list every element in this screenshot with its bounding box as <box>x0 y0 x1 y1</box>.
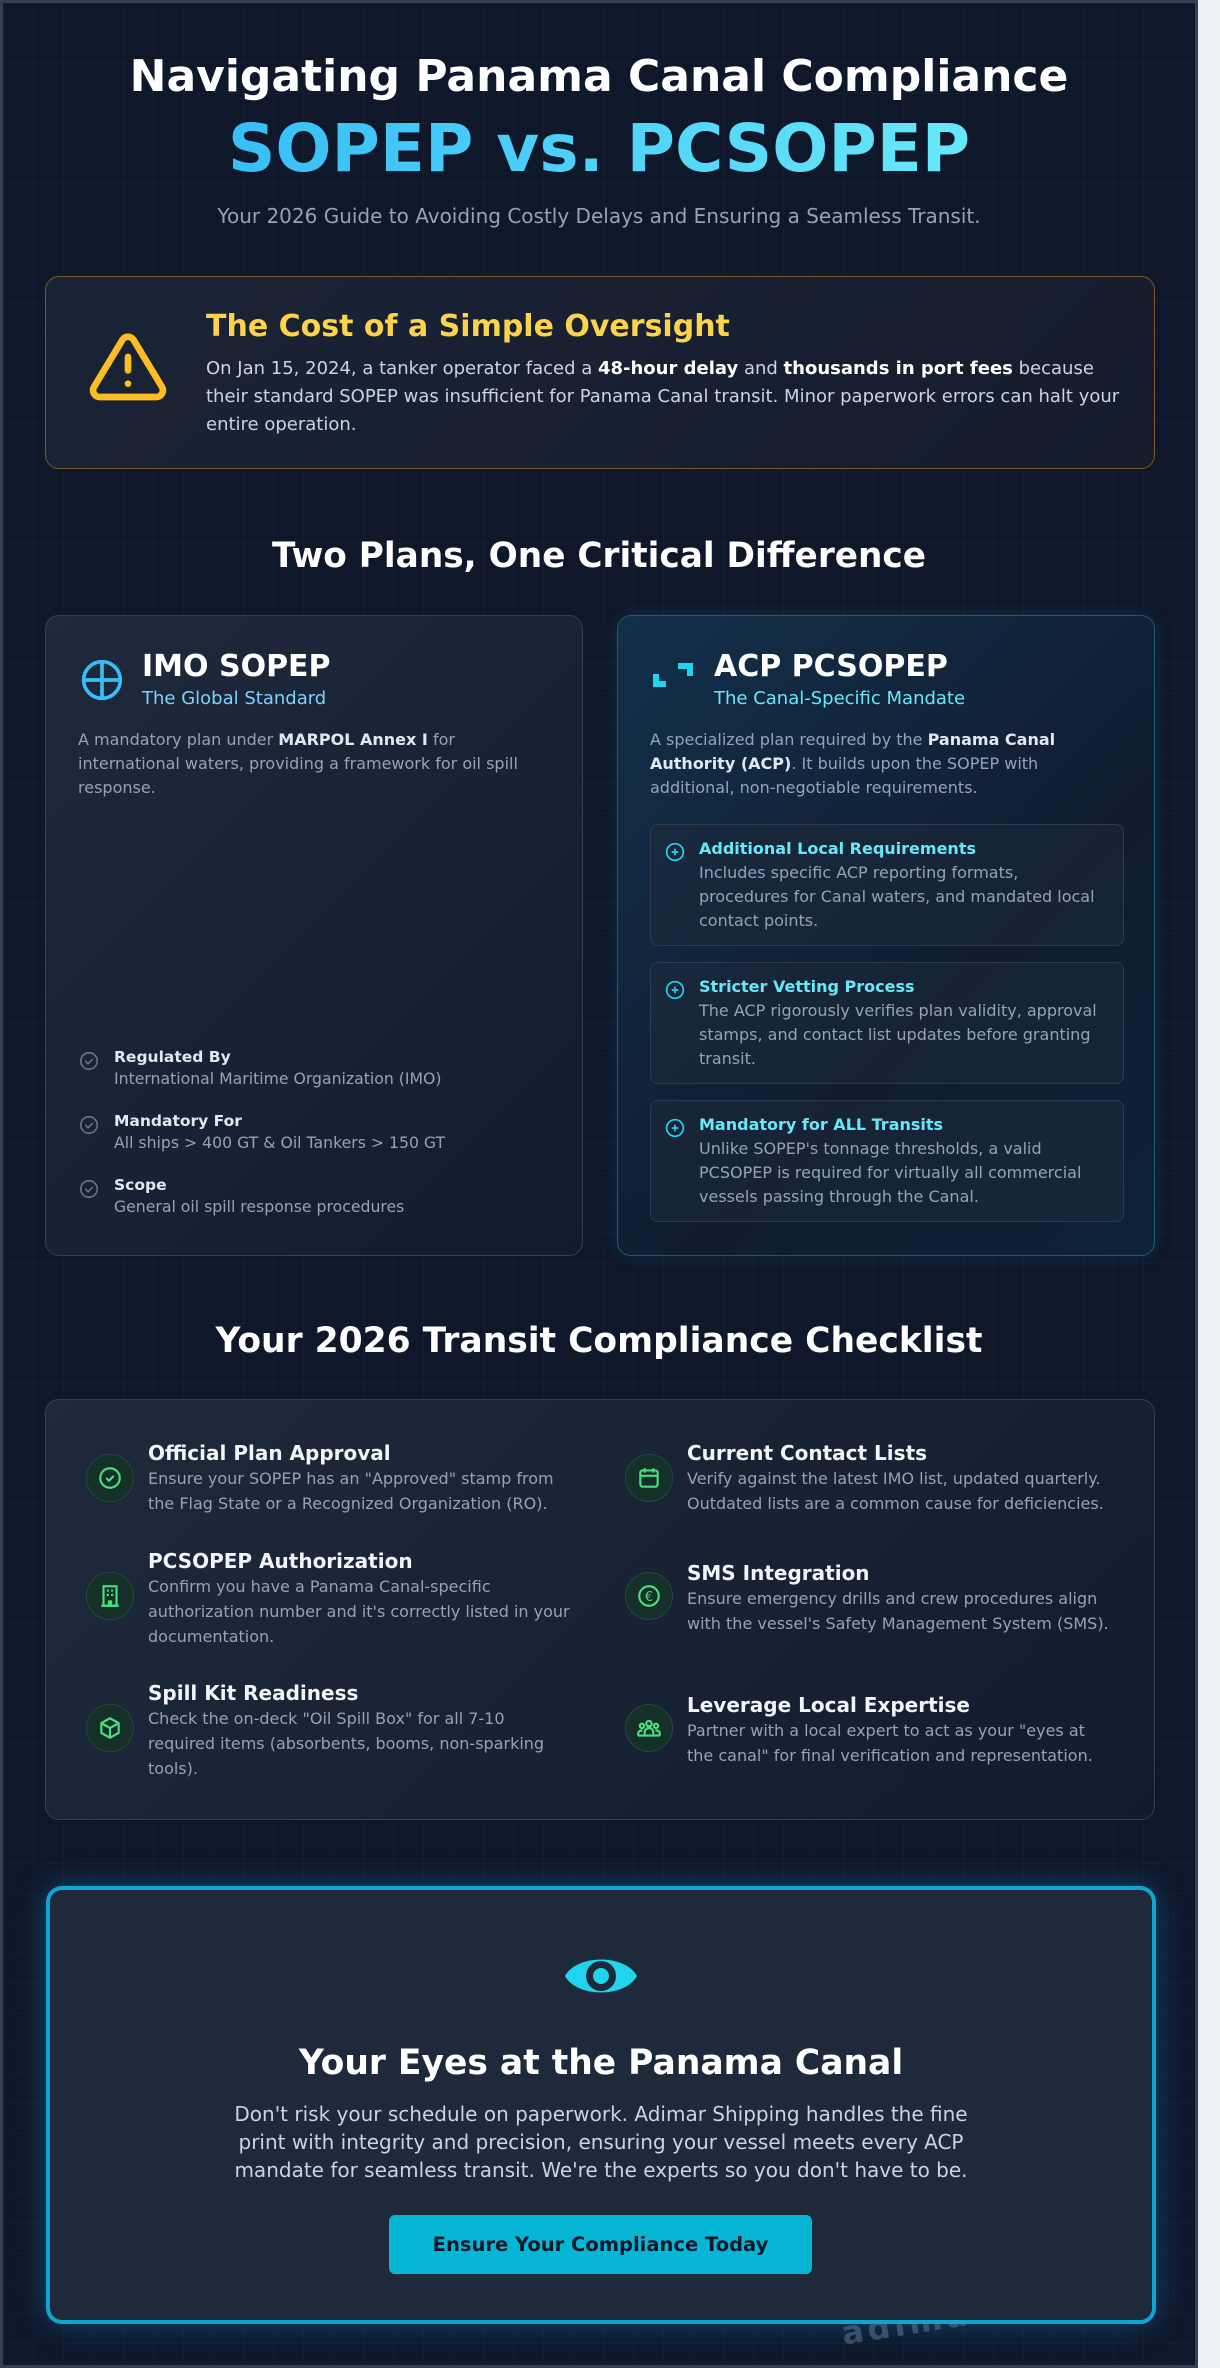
alert heading: The Cost of a Simple Oversight <box>206 309 730 344</box>
item: local expertise: Leverage Local Expertise <box>687 1693 970 1717</box>
fact: mandatory for <box>80 1112 446 1152</box>
item: contact lists <box>625 1441 1104 1513</box>
item: spill kit: Spill Kit Readiness <box>148 1681 358 1705</box>
fact: scope <box>80 1176 404 1216</box>
requirement: local: Includes specific ACP reporting formats, procedures for Canal waters, and mandated local contact points. <box>699 863 1095 930</box>
requirement: vetting: Stricter Vetting Process <box>699 977 915 996</box>
button <box>389 2215 812 2274</box>
panel: cost of oversight alert <box>45 276 1155 469</box>
item: spill kit: Check the on-deck "Oil Spill Box" for all 7-10 required items (absorbents, booms, non-sparking tools). <box>148 1709 544 1778</box>
alert text: On Jan 15, 2024, a tanker operator faced a 48-hour delay and thousands in port fees because their standard SOPEP was insufficient for Panama Canal transit. Minor paperwork errors can halt your entire operation. <box>206 358 1119 435</box>
requirement: all transits: Unlike SOPEP's tonnage thresholds, a valid PCSOPEP is required for virtually all commercial vessels passing through the Canal. <box>699 1139 1081 1206</box>
icon: canal arrows <box>653 663 693 687</box>
requirement: vetting: The ACP rigorously verifies plan validity, approval stamps, and contact list updates before granting transit. <box>699 1001 1097 1068</box>
fact: scope: Scope <box>114 1176 167 1194</box>
requirement: vetting <box>650 962 1124 1084</box>
requirement: local: Additional Local Requirements <box>699 839 976 858</box>
item: pcsopep authorization: PCSOPEP Authorization <box>148 1549 413 1573</box>
panel: checklist <box>45 1399 1155 1820</box>
watermark: adimarsh <box>839 2284 1042 2353</box>
item: local expertise <box>625 1693 1093 1765</box>
fact: mandatory for: All ships > 400 GT & Oil Tankers > 150 GT <box>114 1133 445 1152</box>
heading: two plans: Two Plans, One Critical Difference <box>272 536 926 576</box>
item: official plan approval: Ensure your SOPEP has an "Approved" stamp from the Flag State or a Recognized Organization (RO). <box>148 1469 554 1513</box>
panel: call to action <box>46 1886 1156 2324</box>
card subtitle: The Global Standard <box>142 688 326 709</box>
icon: globe crosshair <box>82 660 122 700</box>
item: pcsopep authorization: Confirm you have a Panama Canal-specific authorization number and it's correctly listed in your documentation. <box>148 1577 570 1646</box>
item: pcsopep authorization <box>86 1549 570 1646</box>
card title: IMO SOPEP <box>142 649 331 684</box>
item: official plan approval <box>86 1441 554 1513</box>
fact: regulated by: Regulated By <box>114 1048 231 1066</box>
tagline: Your 2026 Guide to Avoiding Costly Delays and Ensuring a Seamless Transit. <box>217 204 981 228</box>
hero subtitle: SOPEP vs. PCSOPEP: SOPEP vs. PCSOPEP <box>228 110 970 187</box>
requirement: local <box>650 824 1124 946</box>
description: A specialized plan required by the Panama Canal Authority (ACP). It builds upon the SOPEP with additional, non-negotiable requirements. <box>650 730 1055 797</box>
item: local expertise: Partner with a local expert to act as your "eyes at the canal" for final verification and representation. <box>687 1721 1093 1765</box>
fact: regulated by: International Maritime Organization (IMO) <box>114 1069 442 1088</box>
icon: eye <box>565 1960 637 1992</box>
requirement: all transits: Mandatory for ALL Transits <box>699 1115 943 1134</box>
button: Ensure Your Compliance Today <box>433 2233 768 2256</box>
cta text: Don't risk your schedule on paperwork. Adimar Shipping handles the fine print with integrity and precision, ensuring your vessel meets every ACP mandate for seamless transit. We're the experts so you don't have to be. <box>234 2102 968 2182</box>
card subtitle: The Canal-Specific Mandate <box>714 688 965 709</box>
item: contact lists: Current Contact Lists <box>687 1441 927 1465</box>
item: official plan approval: Official Plan Approval <box>148 1441 391 1465</box>
heading: checklist: Your 2026 Transit Compliance Checklist <box>216 1321 982 1361</box>
panel: ACP PCSOPEP <box>617 615 1155 1256</box>
item: sms integration: SMS Integration <box>687 1561 870 1585</box>
panel: IMO SOPEP <box>45 615 583 1256</box>
card title: ACP PCSOPEP <box>714 649 948 684</box>
cta heading: Your Eyes at the Panama Canal <box>299 2043 903 2083</box>
fact: mandatory for: Mandatory For <box>114 1112 242 1130</box>
description: A mandatory plan under MARPOL Annex I for international waters, providing a framework for oil spill response. <box>78 730 518 797</box>
fact: scope: General oil spill response procedures <box>114 1197 404 1216</box>
icon: warning triangle <box>90 334 166 400</box>
item: sms integration: Ensure emergency drills and crew procedures align with the vessel's Safety Management System (SMS). <box>687 1589 1109 1633</box>
item: contact lists: Verify against the latest IMO list, updated quarterly. Outdated lists are a common cause for deficiencies. <box>687 1469 1104 1513</box>
item: spill kit <box>86 1681 544 1778</box>
title: Navigating Panama Canal Compliance <box>130 51 1068 102</box>
item: sms integration <box>625 1561 1109 1633</box>
fact: regulated by <box>80 1048 442 1088</box>
requirement: all transits <box>650 1100 1124 1222</box>
item: sms integration: € <box>645 1590 653 1605</box>
